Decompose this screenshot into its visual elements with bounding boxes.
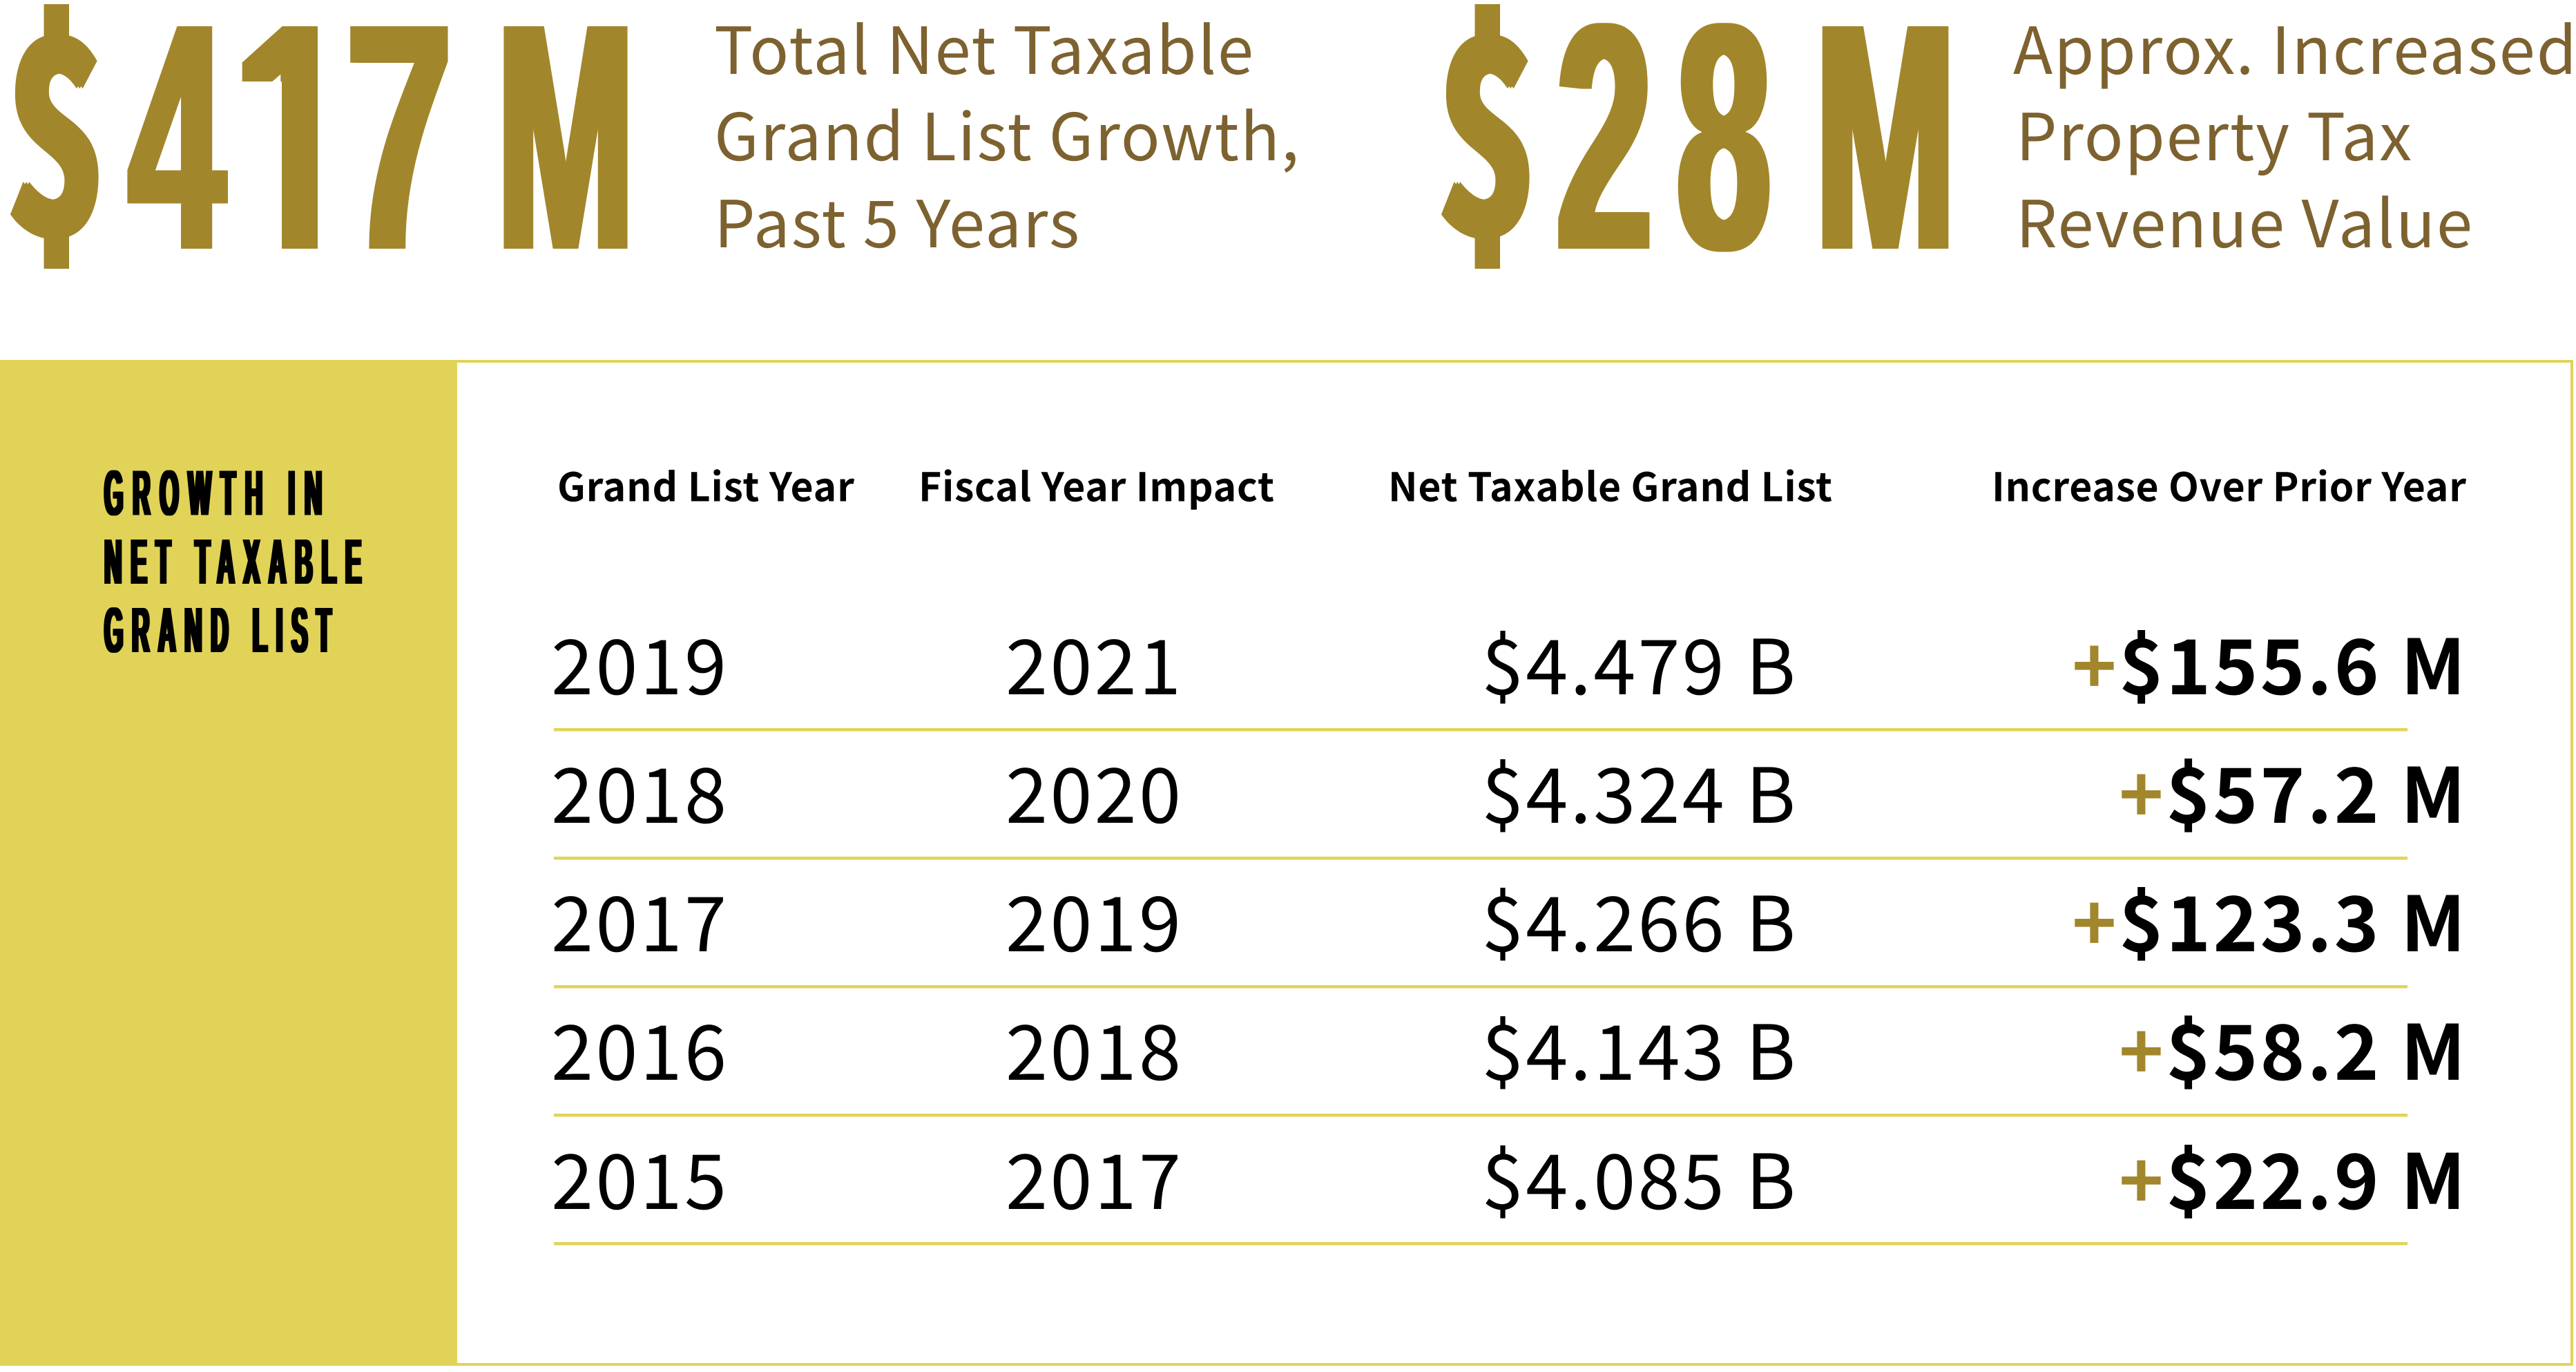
stat: $28 M increased property tax revenue (1437, 0, 2576, 318)
row: 2015: +$22.9 M (2119, 1121, 2466, 1231)
row: 2018: $4.324 B (1481, 734, 1796, 845)
panel: growth table frame (1, 361, 2572, 1364)
row: 2019: 2021 (1006, 606, 1181, 716)
description: approx. increased property tax revenue value: Property Tax (2016, 86, 2412, 180)
row: 2016: +$58.2 M (2119, 991, 2466, 1102)
row: 2017: 2019 (1006, 863, 1181, 973)
stat: $417 M total net taxable growth (10, 4, 1296, 269)
description: approx. increased property tax revenue value: Approx. Increased (2013, 0, 2576, 93)
row: 2019: $4.479 B (1481, 606, 1796, 716)
column headers: Increase Over Prior Year (1992, 456, 2466, 513)
row: 2015: 2017 (1006, 1121, 1181, 1231)
heading: growth in net taxable grand list: GROWTH IN (104, 457, 322, 529)
row: 2016 (551, 991, 2466, 1102)
description: approx. increased property tax revenue value: Revenue Value (2016, 173, 2472, 267)
description: total net taxable grand list growth: Grand List Growth, (714, 86, 1299, 180)
panel: yellow sidebar with heading (0, 360, 457, 1366)
row: 2016: $4.143 B (1481, 991, 1796, 1102)
row: 2016: 2018 (1006, 991, 1181, 1102)
row: 2015 (551, 1121, 2466, 1231)
big number: $28 M (1437, 0, 1955, 318)
column headers: Net Taxable Grand List (1388, 456, 1832, 513)
row: 2017: +$123.3 M (2072, 863, 2466, 973)
row: 2016: 2016 (551, 991, 727, 1102)
row: 2018: 2020 (1006, 734, 1181, 845)
heading: growth in net taxable grand list: GRAND LIST (104, 594, 331, 666)
row: 2018: 2018 (551, 734, 727, 845)
row: 2018: +$57.2 M (2119, 734, 2466, 845)
row: 2015: 2015 (551, 1121, 727, 1231)
row: 2017 (551, 863, 2466, 973)
description: total net taxable grand list growth (714, 0, 1299, 267)
row: 2015: $4.085 B (1481, 1121, 1796, 1231)
row: 2019: +$155.6 M (2072, 606, 2466, 716)
description: total net taxable grand list growth: Past 5 Years (714, 173, 1079, 267)
heading: growth in net taxable grand list: NET TAXABLE (104, 526, 361, 598)
column headers (557, 456, 2466, 513)
row: 2017: $4.266 B (1481, 863, 1796, 973)
row: 2019: 2019 (551, 606, 727, 716)
description: approx. increased property tax revenue value (2013, 0, 2576, 267)
table: grand list figures (551, 456, 2466, 1245)
row: 2019 (551, 606, 2466, 716)
column headers: Fiscal Year Impact (919, 456, 1274, 513)
heading: growth in net taxable grand list (104, 457, 361, 666)
description: total net taxable grand list growth: Total Net Taxable (714, 0, 1253, 93)
column headers: Grand List Year (557, 456, 854, 513)
big number: $417 M (10, 4, 628, 269)
row: 2017: 2017 (551, 863, 727, 973)
row: 2018 (551, 734, 2466, 845)
